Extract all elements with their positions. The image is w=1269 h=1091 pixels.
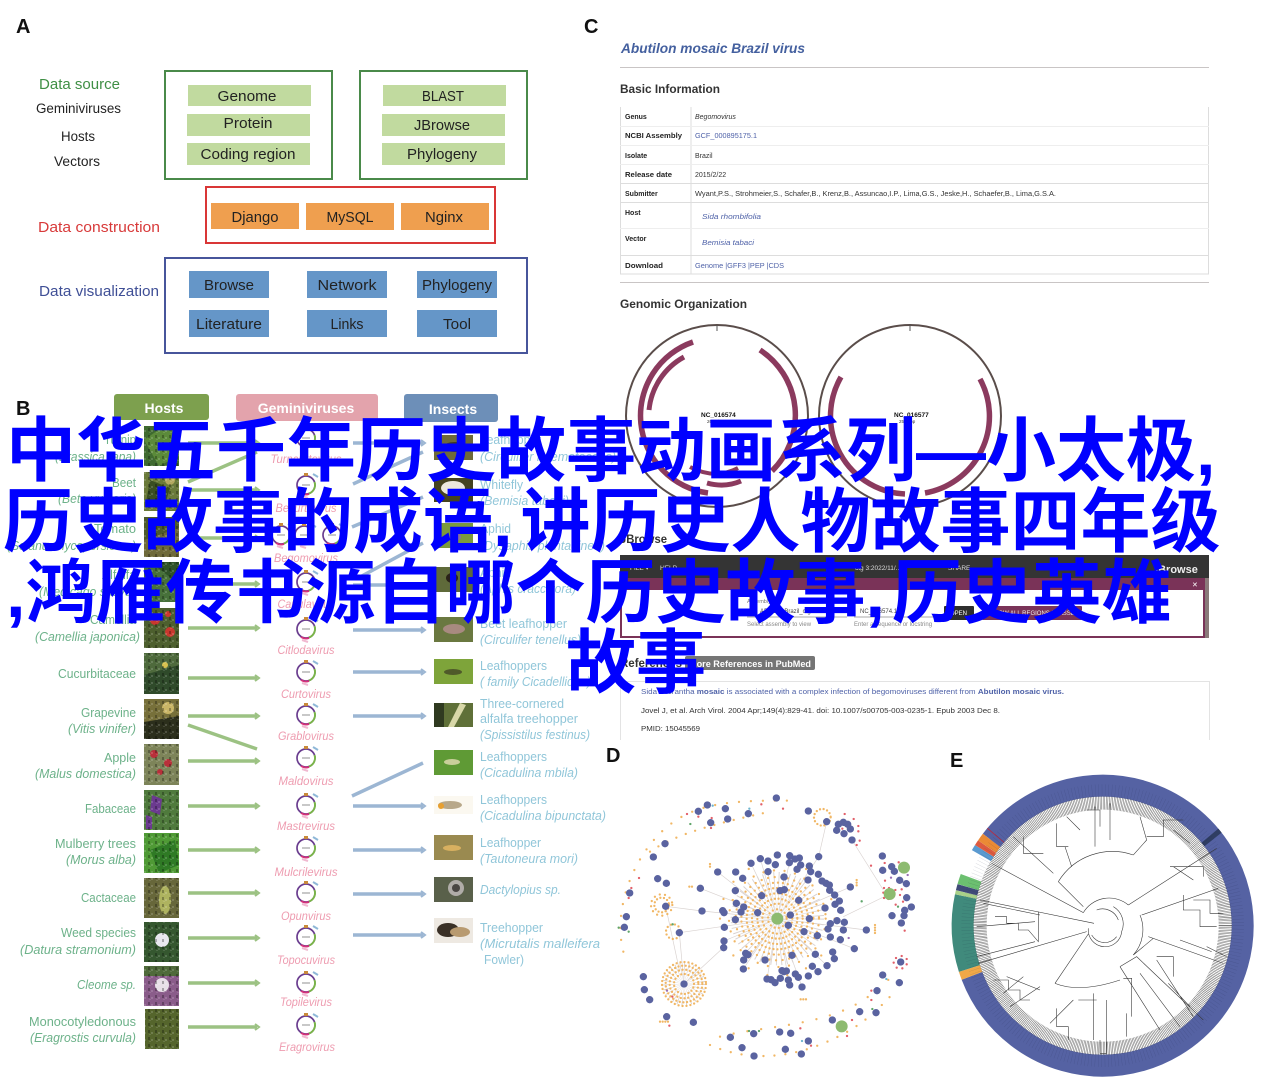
- references list: [620, 682, 1210, 740]
- genome map DNA-B: NC_016577: [894, 412, 929, 419]
- blue overlaid headline: ,鸿雁传书源自哪个历史故事,历史英雄: [6, 554, 1172, 632]
- basic information table: GCF_000895175.1: [695, 133, 757, 140]
- geminivirus genus labels: Maldovirus: [278, 774, 334, 788]
- insect labels: Aphid: [480, 565, 511, 580]
- virus title: Abutilon mosaic Brazil virus: [620, 40, 805, 56]
- insect labels: (Cicadulina mbila): [480, 765, 578, 780]
- JBrowse viewer: ctg 3:2022/11/...: [855, 565, 901, 572]
- tools box: [360, 71, 527, 179]
- insect labels: (Circulifer tenellus): [480, 632, 581, 647]
- genome map DNA-B: [819, 325, 1001, 507]
- host labels: (Morus alba): [66, 852, 136, 867]
- column headers: Geminiviruses: [258, 400, 354, 416]
- blue overlaid headline: 故事: [566, 624, 706, 702]
- references list: Sida micrantha mosaic is associated with a complex infection of begomoviruses different from Abutilon mosaic virus.: [641, 689, 1064, 696]
- insect labels: Dactylopius sp.: [480, 882, 561, 897]
- blue overlaid headline: 历史故事的成语,讲历史人物故事四年级: [3, 483, 1220, 561]
- data visualization box: Tool: [443, 316, 471, 333]
- geminivirus genus labels: Topilevirus: [280, 995, 332, 1009]
- blue overlaid headline: 中华五千年历史故事动画系列—小太极,: [6, 412, 1215, 490]
- basic information table: Sida rhombifolia: [702, 214, 761, 221]
- basic information heading: Basic Information: [620, 82, 720, 96]
- orange gene nodes: [620, 801, 893, 1056]
- references heading and badge: [620, 656, 815, 670]
- label ticks: [967, 790, 1238, 1061]
- network graph: [619, 798, 911, 1056]
- panel D: interaction network: [606, 745, 911, 1056]
- insect photos: [434, 435, 473, 943]
- tips of the tree: [980, 803, 1225, 1048]
- column headers: [114, 394, 498, 422]
- label E: E: [950, 750, 963, 772]
- host labels: Mulberry trees: [55, 836, 136, 851]
- geminivirus genus labels: Eragrovirus: [279, 1040, 335, 1054]
- genome map DNA-A: [626, 325, 808, 507]
- data source box: Coding region: [200, 146, 296, 163]
- references list: Jovel J, et al. Arch Virol. 2004 Apr;149(4):829-41. doi: 10.1007/s00705-003-0235-1. Epub 2003 Dec 8.: [641, 708, 1000, 715]
- geminivirus genus labels: Curtovirus: [281, 687, 331, 701]
- data visualization label: Data visualization: [39, 283, 159, 300]
- tools box: BLAST: [422, 88, 464, 105]
- insect labels: (Aphis craccivora): [480, 581, 576, 596]
- label D: D: [606, 745, 620, 767]
- data source box: [165, 71, 332, 179]
- basic information table: Genus: [625, 114, 647, 121]
- blue arrows viruses to insects: [352, 440, 425, 938]
- host labels: (Brassica rapa): [55, 449, 136, 464]
- host labels: Cactaceae: [81, 890, 136, 905]
- insect labels: Fowler): [484, 952, 524, 967]
- insect labels: Leafhoppers: [480, 792, 547, 807]
- host labels: Camellia: [90, 612, 137, 627]
- virus species nodes: [624, 798, 911, 1056]
- label B: B: [16, 398, 30, 420]
- column headers: Insects: [429, 401, 477, 417]
- insect labels: (Spissistilus festinus): [480, 727, 590, 742]
- genome map DNA-A: NC_016574: [701, 412, 736, 419]
- host labels: Tomato: [94, 521, 136, 536]
- basic information table: Begomovirus: [695, 114, 736, 121]
- genome map DNA-B: 2595 bp: [899, 419, 916, 424]
- JBrowse viewer: OPEN: [950, 611, 967, 617]
- data construction label: Data construction: [38, 219, 160, 236]
- data visualization box: Literature: [196, 316, 262, 333]
- basic information table: Submitter: [625, 191, 658, 198]
- geminivirus genus labels: Mulcrilevirus: [274, 865, 338, 879]
- host labels: Turnip: [104, 432, 136, 447]
- geminivirus genus labels: [270, 452, 342, 1054]
- basic information table: [620, 107, 1209, 274]
- host labels: (Eragrostis curvula): [30, 1030, 136, 1045]
- host labels: (Vitis vinifer): [68, 721, 136, 736]
- host labels: Beet: [112, 475, 136, 490]
- host labels: Monocotyledonous: [29, 1014, 136, 1029]
- JBrowse viewer: [620, 555, 1209, 638]
- host labels: Alfalfa: [102, 567, 137, 582]
- JBrowse viewer: SHARE: [948, 565, 971, 572]
- data visualization box: Phylogeny: [422, 277, 492, 294]
- insect labels: (Cicadulina bipunctata): [480, 808, 606, 823]
- JBrowse viewer: Select assembly to view: [747, 622, 812, 628]
- host photos: [144, 426, 179, 1049]
- data visualization box: Links: [330, 316, 364, 333]
- green arrows hosts to viruses: [188, 440, 259, 1030]
- insect labels: [480, 432, 616, 967]
- basic information table: Release date: [625, 172, 672, 179]
- insect labels: (Tautoneura mori): [480, 851, 578, 866]
- genus hub nodes: [771, 862, 910, 1032]
- taxon colour ring: [905, 728, 1269, 1091]
- insect labels: (Dysaphis plantaginea): [480, 538, 605, 553]
- label C: C: [584, 16, 598, 38]
- data source labels: Vectors: [54, 154, 100, 169]
- insect labels: ( family Cicadellidae): [480, 674, 591, 689]
- host labels: Apple: [104, 750, 136, 765]
- data visualization box: Network: [318, 277, 377, 294]
- JBrowse viewer: NC_016574.1: [860, 609, 898, 615]
- panel C: virus detail web page: [584, 16, 1210, 740]
- geminivirus genus labels: Begomovirus: [274, 551, 338, 565]
- genomic organization heading: Genomic Organization: [620, 297, 747, 311]
- JBrowse viewer: ABMBV_Brazil_ctg: [760, 609, 811, 615]
- JBrowse viewer: SHOW ALL REGIONS IN ASSEMBLY: [990, 611, 1091, 617]
- insect labels: Leafhopper: [480, 432, 542, 447]
- host labels: Weed species: [61, 925, 136, 940]
- basic information table: Genome |GFF3 |PEP |CDS: [695, 263, 784, 270]
- host labels: (Datura stramonium): [20, 942, 136, 957]
- data construction box: Django: [232, 209, 278, 226]
- basic information table: Isolate: [625, 153, 647, 160]
- insect labels: (Circulifer haematoceps): [480, 449, 616, 464]
- geminivirus genome icons: [272, 426, 344, 1038]
- data source labels: Data source: [39, 76, 120, 93]
- JBrowse viewer: HELP: [660, 565, 677, 572]
- JBrowse viewer: ✕: [1192, 582, 1198, 589]
- host labels: Cleome sp.: [77, 977, 136, 992]
- geminivirus genus labels: Opunvirus: [281, 909, 331, 923]
- JBrowse viewer: FILE ▾: [630, 565, 650, 572]
- geminivirus genus labels: Topocuvirus: [277, 953, 335, 967]
- geminivirus genus labels: Becurtovirus: [276, 501, 336, 515]
- geminivirus genus labels: Citlodavirus: [278, 643, 334, 657]
- geminivirus genus labels: Capulavirus: [278, 597, 334, 611]
- phylogenetic tree: [905, 728, 1269, 1091]
- panel E: circular phylogeny: [905, 728, 1269, 1091]
- insect labels: (Micrutalis malleifera: [480, 936, 600, 951]
- host labels: (Solanum lycopersicum): [7, 538, 136, 553]
- branches: [977, 803, 1227, 1053]
- panel B: hosts, geminiviruses and insects: [7, 394, 616, 1054]
- insect labels: (Bemisia tabaci): [480, 493, 569, 508]
- insect labels: Three-cornered: [480, 696, 564, 711]
- basic information table: 2015/2/22: [695, 172, 726, 179]
- data construction box: Nginx: [425, 209, 463, 226]
- host labels: (Malus domestica): [35, 766, 136, 781]
- JBrowse viewer: Enter a sequence or locstring: [854, 622, 932, 628]
- JBrowse heading: JBrowse: [620, 532, 667, 546]
- insect labels: alfalfa treehopper: [480, 711, 579, 726]
- references heading and badge: References: [620, 656, 682, 670]
- insect labels: Treehopper: [480, 920, 544, 935]
- basic information table: Bemisia tabaci: [702, 240, 754, 247]
- host labels: [7, 432, 140, 1045]
- tools box: Phylogeny: [407, 146, 477, 163]
- basic information table: Brazil: [695, 153, 713, 160]
- host labels: (Beta vulgaris): [58, 491, 136, 506]
- red and other small nodes: [619, 804, 908, 1046]
- data source box: Protein: [224, 115, 272, 132]
- data visualization box: [165, 258, 527, 353]
- insect labels: Leafhopper: [480, 835, 542, 850]
- geminivirus genus labels: Turncurtovirus: [270, 452, 342, 466]
- data visualization box: Browse: [204, 277, 254, 294]
- insect labels: Leafhoppers: [480, 749, 547, 764]
- geminivirus genus labels: Grablovirus: [278, 729, 334, 743]
- host labels: Fabaceae: [85, 801, 136, 816]
- genome map DNA-A: 2618 bp: [707, 419, 724, 424]
- network edges: [666, 822, 890, 995]
- data source labels: Hosts: [61, 129, 95, 144]
- insect labels: Leafhoppers: [480, 658, 547, 673]
- basic information table: Wyant,P.S., Strohmeier,S., Schafer,B., Krenz,B., Assuncao,I.P., Lima,G.S., Jeske,H., Schaefer,B., Lima,G.S.A.: [695, 191, 1056, 198]
- references heading and badge: More References in PubMed: [689, 659, 811, 669]
- insect labels: Beet leafhopper: [480, 616, 568, 631]
- column headers: Hosts: [145, 400, 184, 416]
- insect labels: Aphid: [480, 521, 511, 536]
- label A: A: [16, 16, 30, 38]
- basic information table: Host: [625, 210, 641, 217]
- data source box: Genome: [218, 88, 276, 105]
- basic information table: Download: [625, 263, 663, 270]
- JBrowse viewer: Assembly: [747, 599, 771, 605]
- data construction box: MySQL: [326, 209, 374, 226]
- host labels: Grapevine: [81, 705, 136, 720]
- references list: PMID: 15045569: [641, 726, 700, 733]
- host labels: Cucurbitaceae: [58, 666, 136, 681]
- tools box: JBrowse: [414, 117, 470, 134]
- panel A: database architecture: [16, 16, 527, 353]
- host labels: (Medicago sativa): [39, 584, 136, 599]
- geminivirus genus labels: Mastrevirus: [277, 819, 335, 833]
- data source labels: Geminiviruses: [36, 101, 121, 116]
- insect labels: Whitefly: [480, 477, 523, 492]
- host labels: (Camellia japonica): [35, 629, 140, 644]
- JBrowse viewer: JBrowse: [1152, 564, 1198, 576]
- data construction box: [206, 187, 495, 243]
- data source labels: [36, 76, 121, 169]
- basic information table: Vector: [625, 236, 647, 243]
- basic information table: NCBI Assembly: [625, 133, 682, 140]
